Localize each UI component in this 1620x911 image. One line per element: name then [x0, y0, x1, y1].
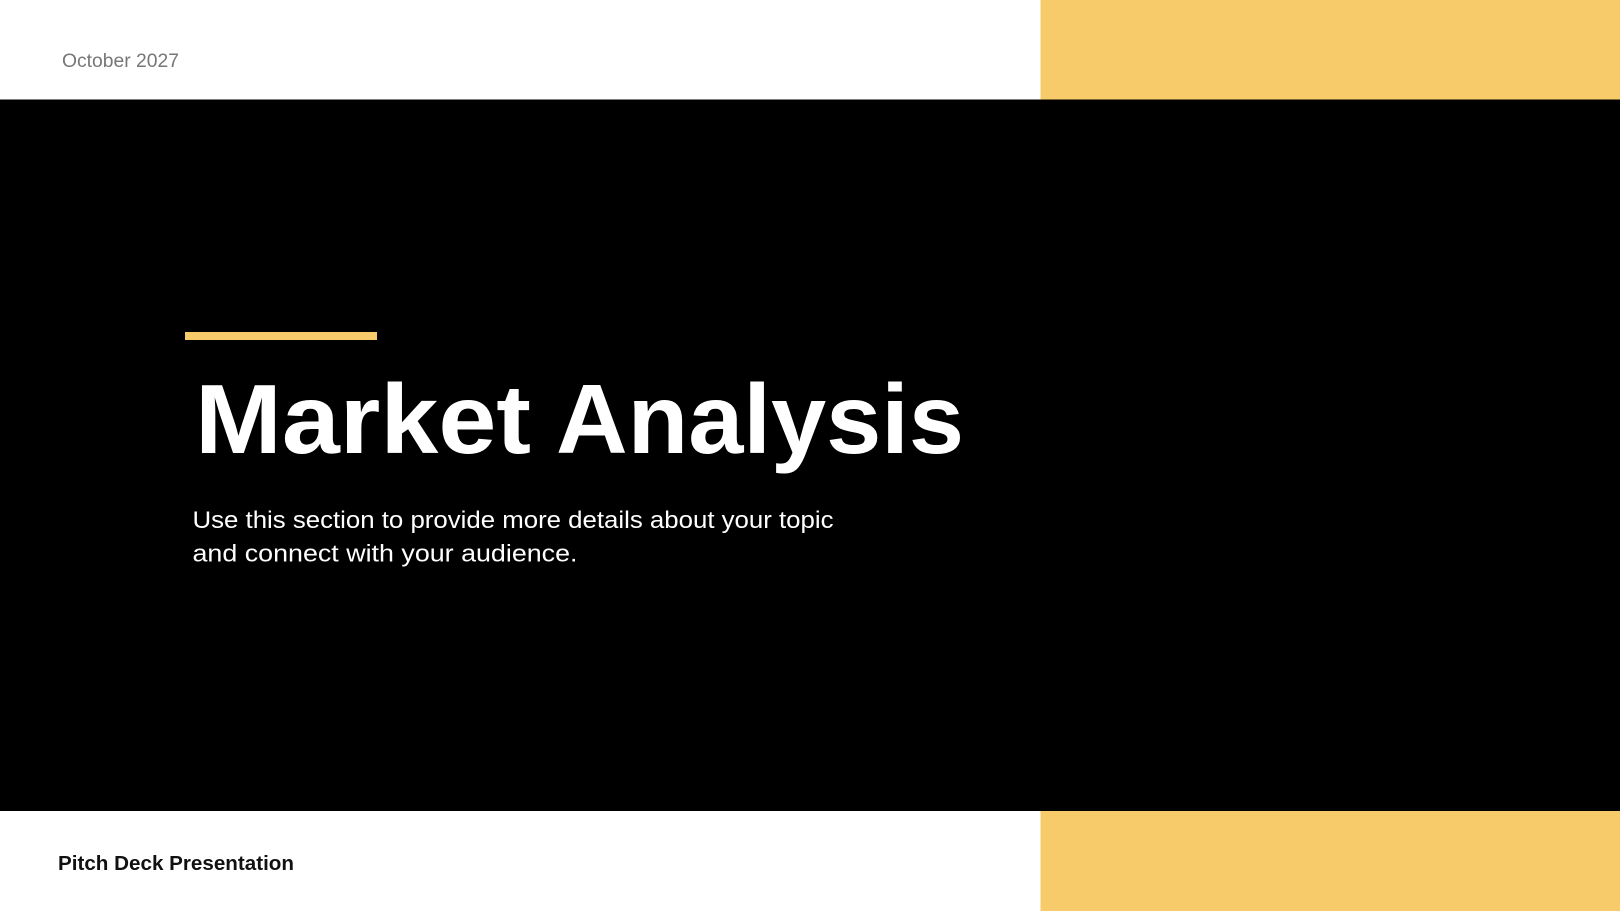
subtitle line 1: Use this section to provide more details about your topic [192, 507, 833, 534]
top yellow block [1040, 0, 1620, 100]
date: October 2027 [62, 51, 179, 72]
title [195, 364, 964, 474]
bottom yellow block [1040, 811, 1620, 911]
subtitle [192, 507, 833, 568]
footer label: Pitch Deck Presentation [58, 853, 294, 875]
title: Market [195, 364, 531, 474]
accent bar [185, 332, 377, 340]
subtitle line 2: and connect with your audience. [192, 540, 578, 568]
black central band [0, 100, 1620, 811]
title: Analysis [556, 364, 964, 474]
